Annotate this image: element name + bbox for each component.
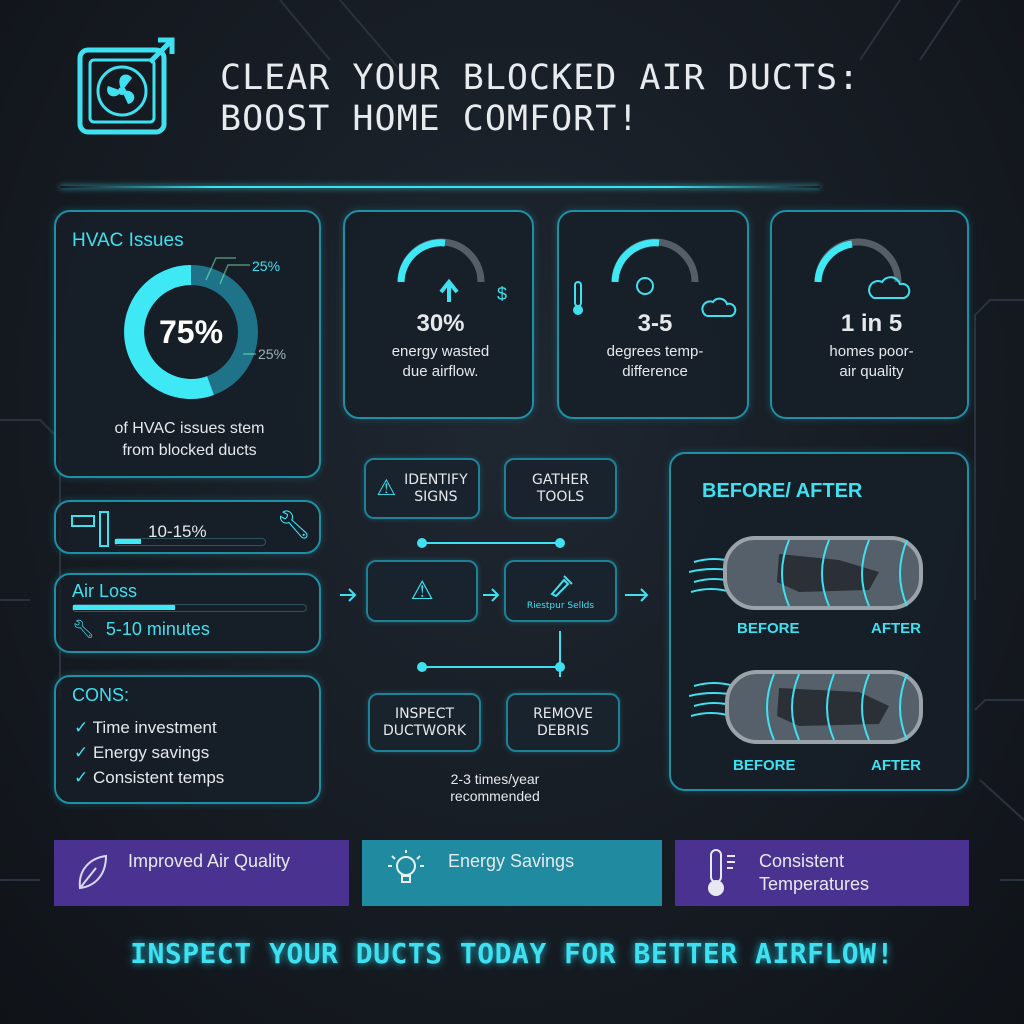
- connector: [340, 538, 648, 677]
- step: identify signs: ⚠: [376, 476, 396, 501]
- value: 10-15%: [148, 522, 207, 541]
- benefit: consistent temperatures: Consistent: [759, 851, 844, 871]
- stat text: [392, 310, 489, 380]
- benefit: energy savings: [362, 840, 662, 906]
- footer call to action: INSPECT YOUR DUCTS TODAY FOR BETTER AIRFLOW!: [130, 937, 894, 970]
- benefit: consistent temperatures: Temperatures: [759, 874, 869, 894]
- title: BOOST HOME COMFORT!: [220, 99, 639, 139]
- step: inspect ductwork: [368, 693, 481, 752]
- panel: air quality: [770, 210, 969, 419]
- stat text: difference: [622, 363, 688, 380]
- gauge icon: $: [497, 284, 507, 304]
- stat text: due airflow.: [403, 363, 478, 380]
- benefit: energy savings: Energy Savings: [448, 851, 574, 871]
- donut chart: 75%: [159, 314, 223, 350]
- step: flashlight: Riestpur Sellds: [527, 600, 594, 610]
- icon: bulb: [388, 850, 424, 883]
- panel: energy wasted: [343, 210, 534, 419]
- step: identify signs: SIGNS: [414, 488, 457, 504]
- duct illustration 1: [689, 536, 923, 610]
- progress bar: [114, 538, 266, 546]
- step: inspect ductwork: INSPECT: [395, 706, 454, 722]
- stat text: homes poor-: [829, 343, 914, 360]
- list: ✓ Time investment: [74, 718, 217, 737]
- step: gather tools: GATHER: [532, 472, 589, 488]
- panel: before/after: AFTER: [871, 620, 921, 637]
- flow: process steps: [340, 456, 648, 804]
- heading: BEFORE/ AFTER: [702, 480, 862, 502]
- icon: thermometer: [708, 849, 735, 896]
- title: [220, 58, 860, 139]
- stat text: [607, 310, 703, 380]
- panel: cons list: [54, 675, 321, 804]
- panel: HVAC issues: [54, 210, 321, 478]
- step: gather tools: TOOLS: [537, 488, 584, 504]
- icon: leaf: [78, 854, 107, 890]
- labels: BEFORE: [737, 620, 800, 637]
- panel: 10-15% bar: [54, 500, 321, 554]
- caption: [115, 420, 264, 459]
- benefit: air quality: [54, 840, 349, 906]
- donut chart: 25%: [252, 258, 280, 274]
- title: CLEAR YOUR BLOCKED AIR DUCTS:: [220, 58, 860, 98]
- donut chart: 25%: [258, 346, 286, 362]
- progress bar: [72, 604, 307, 612]
- frequency note: 2-3 times/year: [451, 771, 539, 787]
- step: inspect ductwork: DUCTWORK: [383, 722, 466, 738]
- list: [74, 718, 224, 787]
- benefit: consistent temperatures: [675, 840, 969, 906]
- frequency note: [450, 771, 540, 804]
- stat text: energy wasted: [392, 343, 489, 360]
- step: flashlight: [504, 560, 617, 622]
- stat text: [829, 310, 914, 380]
- gauge icon: [814, 238, 910, 299]
- heading: CONS:: [72, 685, 129, 705]
- panel: air loss: [54, 573, 321, 653]
- heading: HVAC Issues: [72, 230, 184, 251]
- icon: wrench: 🔧︎: [276, 509, 312, 540]
- step: identify signs: IDENTIFY: [404, 472, 468, 488]
- step: gather tools: [504, 458, 617, 519]
- labels: BEFORE: [733, 757, 796, 774]
- caption: of HVAC issues stem: [115, 420, 264, 437]
- list: ✓ Consistent temps: [74, 768, 224, 787]
- caption: from blocked ducts: [122, 442, 257, 459]
- duct illustration 2: [689, 670, 923, 744]
- step: remove debris: DEBRIS: [537, 722, 589, 738]
- gauge icon: [398, 238, 507, 304]
- donut chart: [124, 257, 286, 399]
- duct icon: [71, 511, 109, 547]
- benefit: air quality: Improved Air Quality: [128, 851, 290, 871]
- heading: Air Loss: [72, 581, 137, 601]
- step: identify signs: [364, 458, 480, 519]
- stat text: 3-5: [638, 310, 672, 337]
- stat text: 30%: [416, 310, 465, 337]
- divider glow line: [60, 186, 820, 188]
- stat text: air quality: [839, 363, 904, 380]
- panel: before/after: [669, 452, 969, 791]
- step: remove debris: REMOVE: [533, 706, 593, 722]
- step: warning: [366, 560, 478, 622]
- icon: fan logo: [78, 38, 174, 134]
- stat text: degrees temp-: [607, 343, 703, 360]
- gauge icon: [573, 238, 736, 317]
- frequency note: recommended: [450, 788, 540, 804]
- step: remove debris: [506, 693, 620, 752]
- time text: 🔧︎ 5-10 minutes: [72, 619, 210, 639]
- panel: before/after: AFTER: [871, 757, 921, 774]
- panel: temp difference: [557, 210, 749, 419]
- stat text: 1 in 5: [841, 310, 902, 337]
- step: warning: ⚠: [410, 576, 434, 606]
- list: ✓ Energy savings: [74, 743, 209, 762]
